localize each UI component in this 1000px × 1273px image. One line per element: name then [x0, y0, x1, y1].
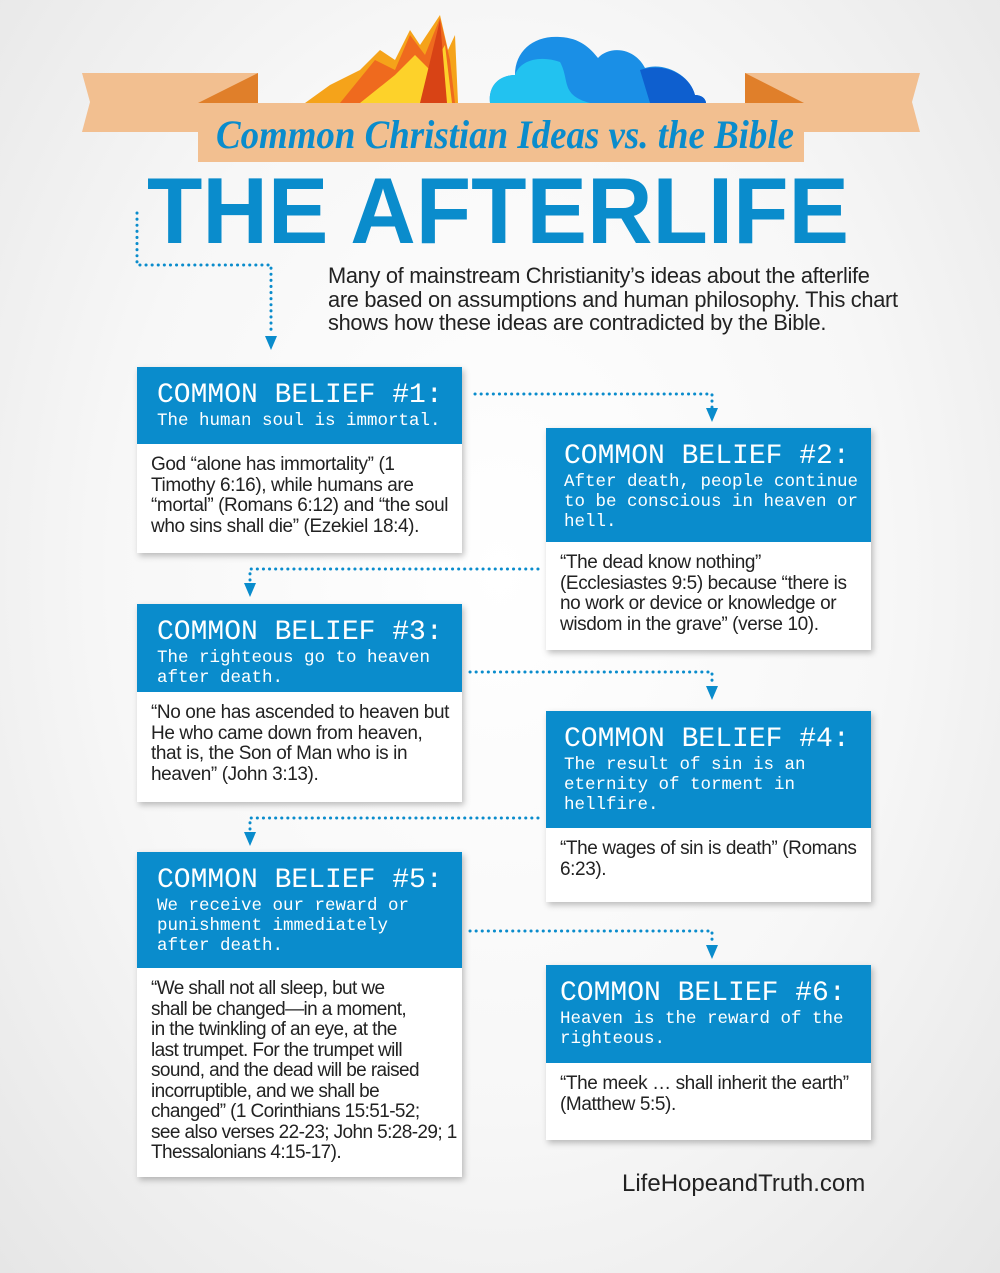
- header art: [82, 15, 920, 260]
- card 5: We receive our reward or: [157, 896, 409, 916]
- card 4: hellfire.: [564, 795, 659, 815]
- card 5: Thessalonians 4:15-17).: [151, 1142, 341, 1163]
- card 3: The righteous go to heaven: [157, 648, 430, 668]
- card 3: “No one has ascended to heaven but He who came down from heaven, that is, the Son of Man who is in heaven” (John 3:13).: [151, 702, 449, 784]
- title: THE AFTERLIFE: [147, 158, 849, 260]
- card 5: after death.: [157, 936, 283, 956]
- card 2: [546, 428, 871, 650]
- card 4: The result of sin is an: [564, 755, 806, 775]
- card 6: righteous.: [560, 1029, 665, 1049]
- card 5: shall be changed—in a moment,: [151, 998, 406, 1020]
- card 3: after death.: [157, 668, 283, 688]
- card 2: “The dead know nothing” (Ecclesiastes 9:5) because “there is no work or device or knowledge or wisdom in the grave” (verse 10).: [560, 552, 847, 634]
- card 5: COMMON BELIEF #5:: [157, 865, 443, 896]
- card 1: COMMON BELIEF #1:: [157, 380, 443, 411]
- card 2: hell.: [564, 512, 617, 532]
- card 1: [137, 367, 462, 553]
- card 1: The human soul is immortal.: [157, 411, 441, 431]
- card 2: After death, people continue: [564, 472, 858, 492]
- card 5: punishment immediately: [157, 916, 388, 936]
- card 6: [546, 965, 871, 1140]
- card 5: “We shall not all sleep, but we: [151, 978, 384, 999]
- intro text: shows how these ideas are contradicted by the Bible.: [328, 310, 826, 335]
- ribbon main: [198, 103, 804, 162]
- intro text: are based on assumptions and human philosophy. This chart: [328, 286, 898, 312]
- ribbon tails: [82, 73, 920, 132]
- intro text: [328, 263, 898, 335]
- card 4: “The wages of sin is death” (Romans 6:23).: [560, 838, 856, 880]
- subtitle script: Common Christian Ideas vs. the Bible: [216, 112, 794, 157]
- card 4: eternity of torment in: [564, 775, 795, 795]
- card 5: incorruptible, and we shall be: [151, 1080, 379, 1102]
- footer url: LifeHopeandTruth.com: [622, 1170, 865, 1197]
- intro text: Many of mainstream Christianity’s ideas about the afterlife: [328, 263, 870, 288]
- card 4: COMMON BELIEF #4:: [564, 724, 850, 755]
- card 2: COMMON BELIEF #2:: [564, 441, 850, 472]
- card 5: sound, and the dead will be raised: [151, 1060, 419, 1081]
- flames: [305, 15, 458, 103]
- card 5: see also verses 22-23; John 5:28-29; 1: [151, 1122, 457, 1142]
- card 5: last trumpet. For the trumpet will: [151, 1040, 402, 1060]
- card 6: “The meek … shall inherit the earth” (Matthew 5:5).: [560, 1073, 849, 1114]
- card 3: [137, 604, 462, 802]
- card 3: COMMON BELIEF #3:: [157, 617, 443, 648]
- card 5: changed” (1 Corinthians 15:51-52;: [151, 1101, 420, 1122]
- card 6: Heaven is the reward of the: [560, 1009, 844, 1029]
- cloud: [490, 37, 706, 103]
- card 4: [546, 711, 871, 902]
- card 1: God “alone has immortality” (1 Timothy 6:16), while humans are “mortal” (Romans 6:12) and “the soul who sins shall die” (Ezekiel 18:4).: [151, 454, 448, 536]
- card 5: [137, 852, 462, 1177]
- card 6: COMMON BELIEF #6:: [560, 978, 846, 1009]
- card 2: to be conscious in heaven or: [564, 492, 858, 512]
- card 5: in the twinkling of an eye, at the: [151, 1019, 397, 1040]
